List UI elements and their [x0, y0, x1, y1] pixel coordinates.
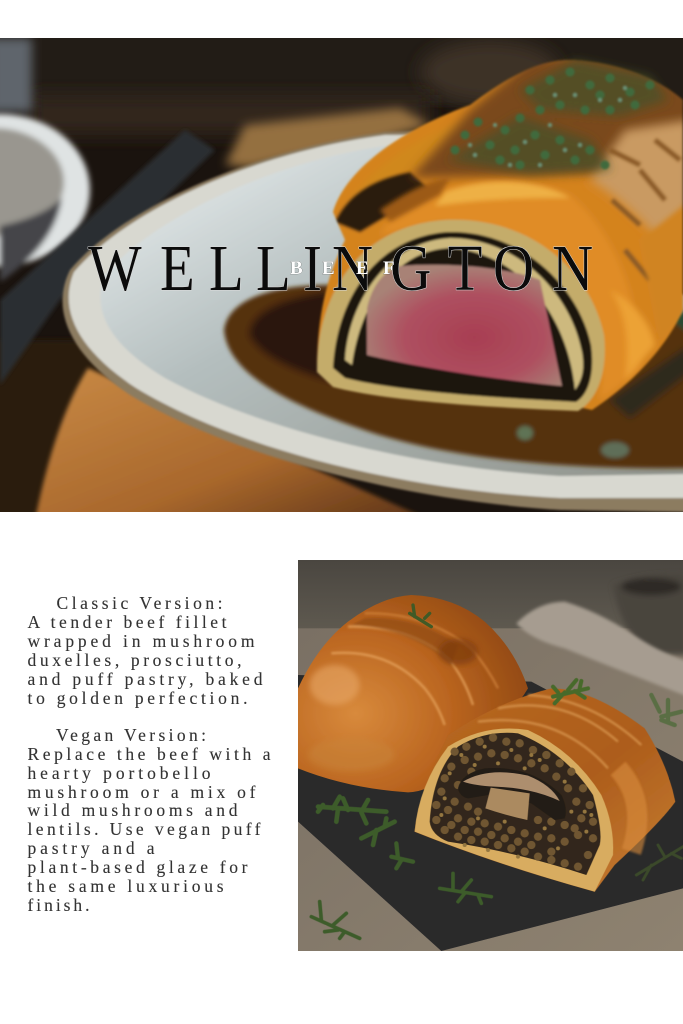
vegan version description: mushroom or a mix of [28, 782, 256, 802]
classic version description: wrapped in mushroom [28, 631, 255, 651]
portobello mushroom [458, 768, 566, 820]
vegan version description: pastry and a [28, 838, 155, 858]
plate [62, 130, 683, 512]
classic version description [28, 612, 263, 708]
blurred bowl at left [0, 114, 90, 282]
crust colour patches [340, 174, 406, 214]
front pastry [415, 688, 675, 892]
beef fillet [367, 265, 562, 386]
description text block [28, 593, 271, 915]
subtitle: BEEF: BEEF [290, 258, 395, 279]
blurred bowl [613, 574, 683, 655]
wall and table [298, 560, 683, 952]
vegan version description: the same luxurious [28, 876, 224, 896]
lentils [436, 738, 593, 867]
pastry cut face [317, 220, 605, 411]
rear pastry [298, 595, 528, 792]
classic version description: duxelles, prosciutto, [28, 650, 242, 670]
vegan version heading: Vegan Version: [56, 725, 206, 745]
herb garnish [448, 60, 668, 174]
blurred cutlery [0, 130, 215, 385]
vegan wellington photo [298, 560, 683, 952]
vegan version description: hearty portobello [28, 763, 211, 783]
vegan version description: lentils. Use vegan puff [28, 819, 261, 839]
cut face [415, 729, 613, 892]
vegan version description: Replace the beef with a [28, 744, 271, 764]
lentil filling [430, 733, 600, 875]
vegan version description: finish. [28, 895, 90, 915]
wellington pastry [300, 50, 683, 420]
hero photo: beef wellington on plate [0, 30, 683, 520]
crust [415, 688, 675, 892]
vegan version description: plant-based glaze for [28, 857, 248, 877]
slate board [298, 675, 683, 951]
wooden board [35, 368, 430, 520]
vegan version description: wild mushrooms and [28, 800, 238, 820]
title: WELLINGTON: WELLINGTON [88, 232, 593, 305]
linen cloth [516, 602, 683, 697]
classic version description: A tender beef fillet [28, 612, 227, 632]
hero background [0, 30, 683, 520]
vegan version description [28, 744, 271, 915]
sauce pool [224, 285, 683, 468]
pastry crust [300, 50, 683, 420]
classic version heading: Classic Version: [56, 593, 222, 613]
classic version description: to golden perfection. [28, 688, 248, 708]
classic version description: and puff pastry, baked [28, 669, 263, 689]
thyme sprigs [311, 680, 683, 938]
